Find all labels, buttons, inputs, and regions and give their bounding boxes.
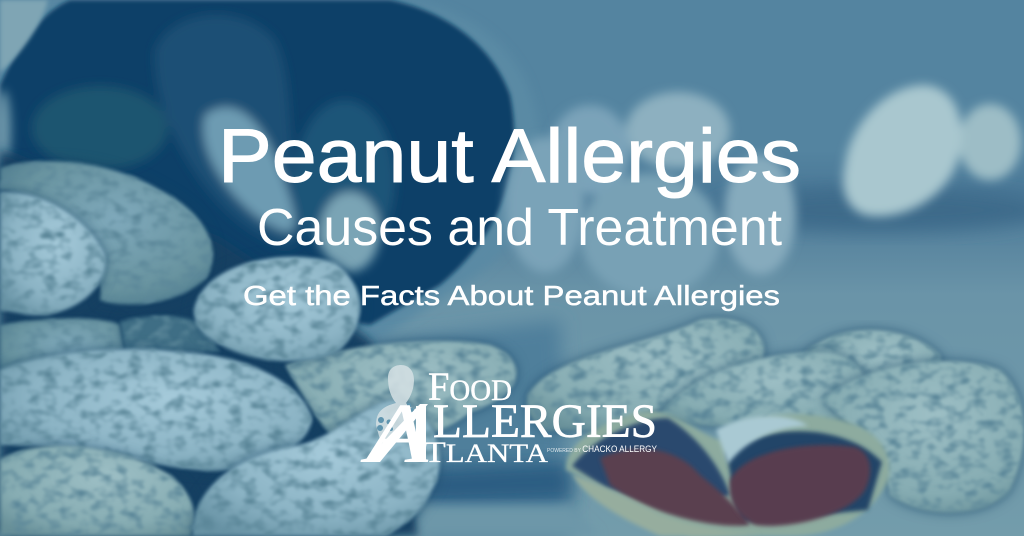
logo word: Atlanta: TLANTA — [424, 436, 548, 469]
logo word: Allergies: LLERGIES — [433, 395, 657, 448]
logo: Food Allergies Atlanta — [360, 364, 657, 481]
logo letter: large A: A — [360, 385, 429, 481]
peanuts inside sack — [0, 15, 585, 273]
logo word: Food: FOOD — [428, 364, 512, 409]
dark gaps under the foreground peanuts — [0, 150, 420, 536]
distant peanuts, right — [550, 85, 1021, 297]
title: Peanut Allergies — [218, 114, 801, 199]
subtitle: Causes and Treatment — [257, 199, 783, 257]
foreground peanuts, left — [0, 161, 213, 304]
background fabric shadow — [710, 188, 1024, 232]
fabric near the centre — [360, 320, 570, 536]
foreground peanuts, right — [527, 318, 764, 430]
logo line: powered by Chacko Allergy: POWERED BY CHACKO ALLERGY — [547, 444, 657, 454]
tagline: Get the Facts About Peanut Allergies — [243, 280, 780, 311]
icon: child silhouette — [376, 365, 419, 447]
burlap sack — [0, 0, 540, 345]
open peanut shell with kernels — [566, 411, 889, 536]
